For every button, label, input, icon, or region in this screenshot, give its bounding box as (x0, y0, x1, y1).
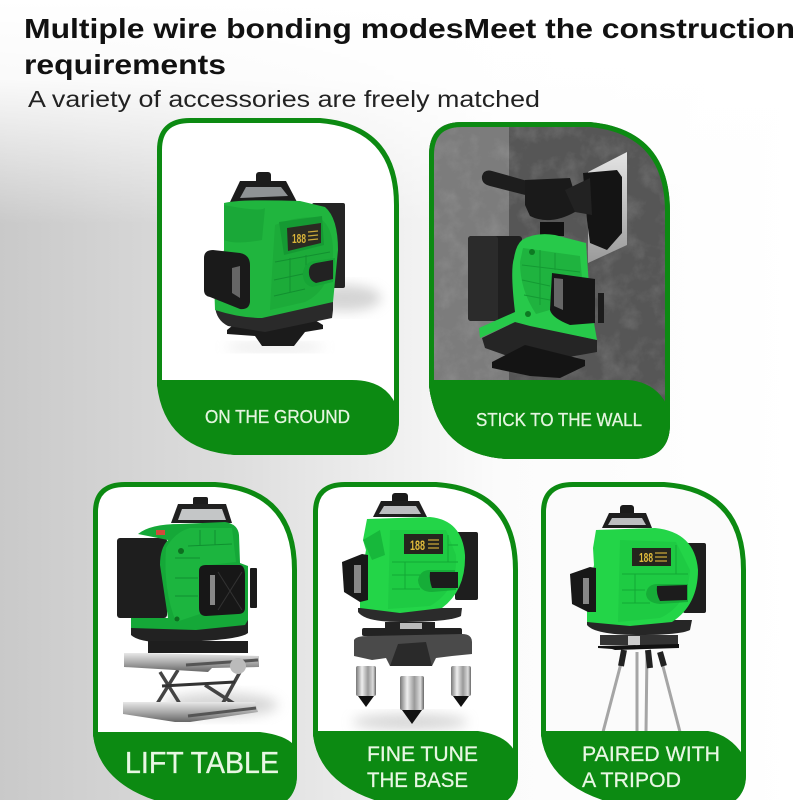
label band (157, 380, 399, 455)
label: ON THE GROUND (205, 407, 350, 427)
label band (93, 732, 297, 800)
label (582, 743, 720, 792)
icon: laser level on the ground (204, 172, 381, 351)
icon: display: 188 (410, 537, 425, 553)
label: LIFT TABLE (125, 745, 279, 780)
label band (429, 380, 670, 459)
label: FINE TUNE (367, 743, 478, 766)
icon: scissor lift table (123, 653, 259, 722)
panel: paired with a tripod (541, 484, 746, 800)
title: Multiple wire bonding modesMeet the construction (24, 13, 795, 44)
icon: display (632, 548, 671, 566)
label: A TRIPOD (582, 769, 681, 792)
panel: stick to the wall (429, 122, 670, 459)
icon: display: 188 (639, 550, 653, 565)
icon: display: 188 (292, 231, 306, 246)
label band (541, 731, 746, 800)
title (24, 13, 795, 80)
label band (313, 731, 518, 800)
panel: fine tune the base (313, 484, 518, 800)
icon: display (287, 223, 321, 251)
label: THE BASE (367, 769, 468, 792)
icon: laser level on lift table (117, 497, 278, 722)
title: requirements (24, 49, 226, 80)
icon: wall plate and mount (482, 152, 627, 263)
icon: laser level on adjustable base (342, 493, 478, 730)
concrete wall (429, 122, 670, 459)
icon: three-screw base (354, 622, 472, 724)
panel: lift table (93, 484, 297, 800)
label: STICK TO THE WALL (476, 410, 642, 430)
icon: display (404, 534, 443, 554)
label (367, 743, 478, 792)
icon: laser level on tripod (570, 505, 706, 732)
icon: laser level mounted (468, 234, 604, 378)
subtitle: A variety of accessories are freely matched (28, 86, 540, 112)
label: PAIRED WITH (582, 743, 720, 766)
panel: on the ground (157, 120, 399, 455)
